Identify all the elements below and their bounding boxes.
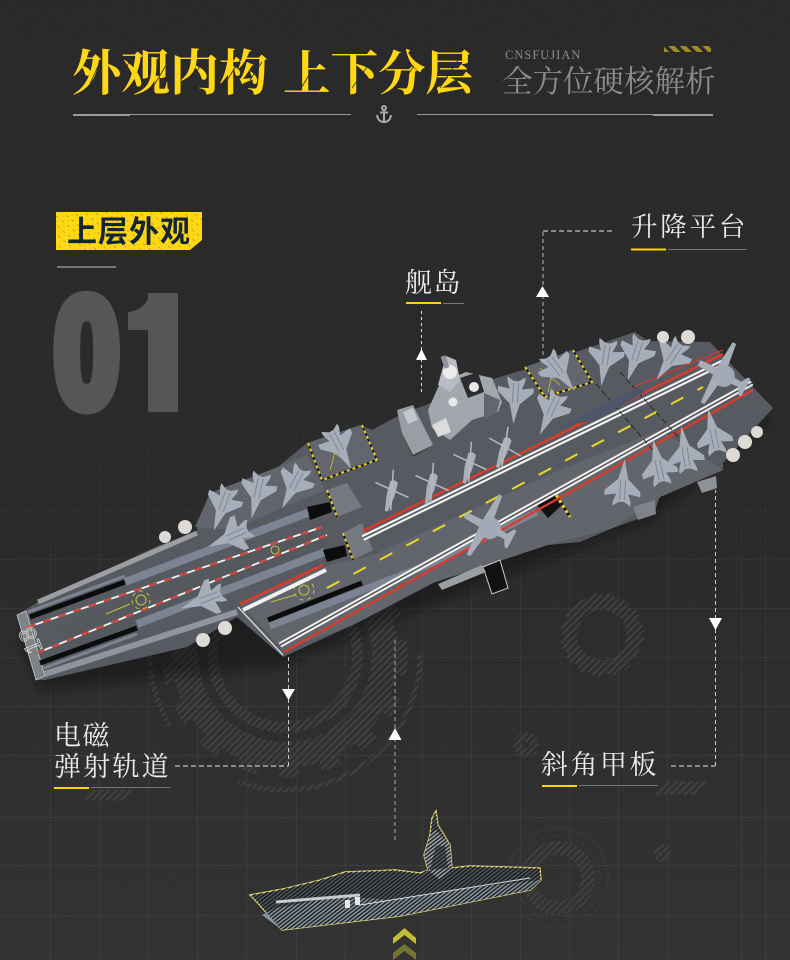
bow dashed runway lines xyxy=(28,527,327,653)
blue panel xyxy=(560,386,645,427)
icon: upward chevrons xyxy=(393,928,416,960)
title: main heading: 上下分层 xyxy=(283,48,475,101)
carrier hull xyxy=(17,332,773,680)
bow number: 18 xyxy=(14,623,49,658)
helicopters xyxy=(369,422,529,516)
label: 斜角甲板: 斜角甲板 xyxy=(541,750,659,780)
title: subtitle xyxy=(502,48,716,99)
upper bow rail xyxy=(38,533,197,602)
bow lattice xyxy=(17,611,45,680)
stern side fittings xyxy=(438,476,717,594)
icon: hazard stripe tag xyxy=(664,46,711,52)
carrier deck lighter panels xyxy=(60,430,723,650)
section number 01 xyxy=(53,290,178,414)
leader: centre arrow to small ship xyxy=(388,640,402,843)
deck cross markings xyxy=(596,372,690,470)
title: main heading xyxy=(72,46,475,101)
leader: 舰岛 xyxy=(416,311,427,395)
label: 舰岛: 舰岛 xyxy=(405,268,462,298)
lower bow catapult channel xyxy=(40,552,325,668)
carrier: main model xyxy=(14,330,773,690)
background gears xyxy=(81,520,709,928)
jets xyxy=(174,331,735,625)
carrier shadow xyxy=(20,350,770,690)
title: subtitle: CNSFUJIAN xyxy=(505,48,581,62)
title: main heading: 外观内构 xyxy=(72,46,268,101)
angled deck upper runway xyxy=(240,350,728,610)
section badge: 上层外观: 上层外观 xyxy=(67,216,191,249)
label: 电磁弹射轨道: 弹射轨道 xyxy=(54,752,171,782)
angled deck steel catapults xyxy=(268,512,537,626)
leader: 电磁弹射轨道 xyxy=(175,657,295,766)
section rule xyxy=(57,266,116,268)
lower bow rail xyxy=(45,612,237,674)
lift platform 2 xyxy=(525,350,592,397)
bow launch markings xyxy=(106,546,314,614)
section number 01: 1 xyxy=(110,268,196,441)
angled deck edge xyxy=(238,607,283,655)
angled deck lower runway xyxy=(280,383,753,652)
lift platform 1 xyxy=(308,425,377,480)
section number 01: 0 xyxy=(54,266,120,440)
leader: 升降平台 xyxy=(536,231,612,355)
early-warning aircraft xyxy=(449,333,762,570)
label: 电磁弹射轨道: 电磁 xyxy=(54,721,111,751)
title divider with anchor xyxy=(73,106,713,122)
icon: anchor xyxy=(377,106,391,122)
defence mounts xyxy=(159,330,763,647)
lift platform 3 and deck hatch xyxy=(307,483,570,562)
island superstructure xyxy=(397,356,502,457)
leader: 斜角甲板 xyxy=(671,490,722,766)
title: subtitle: 全方位硬核解析 xyxy=(502,65,716,99)
small carrier illustration xyxy=(250,811,541,930)
label: 升降平台: 升降平台 xyxy=(631,212,748,242)
angled deck centre line xyxy=(327,387,703,588)
upper bow catapult channel xyxy=(28,512,310,617)
label: 电磁弹射轨道 xyxy=(54,721,171,789)
background grid xyxy=(0,461,790,960)
